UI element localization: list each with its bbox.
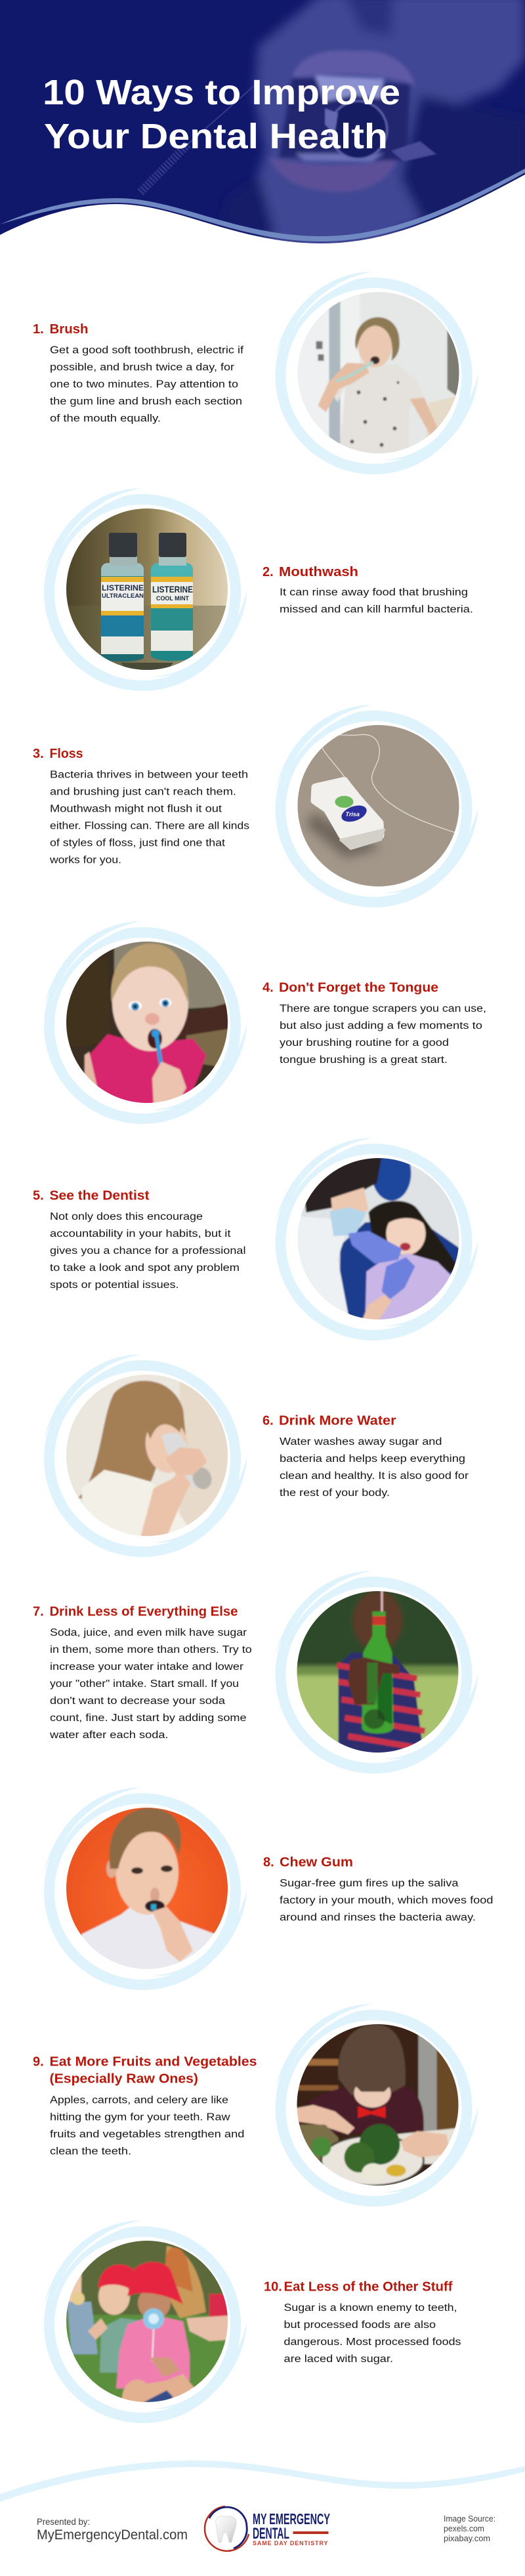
tip 6: water xyxy=(44,1354,469,1557)
presented by: MyEmergencyDental.com xyxy=(37,2527,188,2543)
body 5 xyxy=(50,1211,245,1291)
body 6: bacteria and helps keep everything xyxy=(280,1453,465,1465)
photo 3: floss box: Trisa xyxy=(345,811,360,818)
body 7: count, fine. Just start by adding some xyxy=(50,1713,247,1724)
heading 2: 2. xyxy=(262,565,274,579)
heading 9: 9. xyxy=(33,2055,44,2069)
body 7 xyxy=(49,1627,252,1741)
heading 7: Drink Less of Everything Else xyxy=(50,1605,238,1619)
wave: white page edge xyxy=(0,175,525,262)
body 3 xyxy=(49,769,249,866)
heading 10: Eat Less of the Other Stuff xyxy=(284,2280,453,2295)
dental instrument handle xyxy=(140,85,255,192)
body 9: clean the teeth. xyxy=(50,2146,131,2157)
heading 1: 1. xyxy=(33,322,44,337)
body 6: clean and healthy. It is also good for xyxy=(280,1470,469,1482)
body 1: the gum line and brush each section xyxy=(50,396,242,407)
photo 7: child holding green bottle xyxy=(276,1571,478,1774)
body 5: spots or potential issues. xyxy=(50,1279,178,1291)
body 6 xyxy=(280,1436,469,1499)
body 7: don't want to decrease your soda xyxy=(50,1695,225,1707)
logo wordmark: SAME DAY DENTISTRY xyxy=(253,2540,328,2546)
body 10 xyxy=(284,2302,461,2365)
heading 9 xyxy=(33,2055,257,2087)
body 5: gives you a chance for a professional xyxy=(50,1245,245,1257)
tip 10: less other stuff xyxy=(44,2220,461,2423)
body 6: Water washes away sugar and xyxy=(280,1436,442,1447)
photo 1: boy brushing teeth xyxy=(276,272,478,474)
heading 3: 3. xyxy=(33,747,44,761)
tip 1: brush xyxy=(33,272,478,474)
body 7: water after each soda. xyxy=(49,1730,169,1741)
photo 5: dentist examining girl xyxy=(276,1138,478,1340)
heading 6: 6. xyxy=(262,1413,274,1428)
body 5: accountability in your habits, but it xyxy=(50,1228,231,1239)
logo: My Emergency Dental xyxy=(205,2506,330,2551)
body 3: Mouthwash might not flush it out xyxy=(50,803,222,815)
body 3: either. Flossing can. There are all kinds xyxy=(50,820,249,832)
body 10: but processed foods are also xyxy=(284,2319,436,2331)
title xyxy=(43,73,400,156)
body 2: It can rinse away food that brushing xyxy=(280,587,468,598)
photo 8: boy chewing gum on orange xyxy=(44,1787,247,1990)
body 8: around and rinses the bacteria away. xyxy=(280,1912,476,1923)
body 5: Not only does this encourage xyxy=(50,1211,203,1222)
image source xyxy=(444,2514,495,2543)
presented by xyxy=(37,2517,188,2543)
heading 6: Drink More Water xyxy=(279,1413,396,1428)
tip 8: gum xyxy=(44,1787,494,1990)
heading 2: Mouthwash xyxy=(279,565,358,579)
body 9: fruits and vegetables strengthen and xyxy=(50,2129,244,2140)
body 7: increase your water intake and lower xyxy=(50,1661,243,1672)
photo 9: girl with broccoli xyxy=(276,2004,478,2207)
photo: open mouth with dental mirror xyxy=(140,0,525,249)
heading 7: 7. xyxy=(33,1605,44,1619)
body 2: missed and can kill harmful bacteria. xyxy=(280,604,473,615)
tip 2: mouthwash xyxy=(44,488,473,691)
logo wordmark: DENTAL xyxy=(253,2525,289,2543)
body 9 xyxy=(50,2094,244,2157)
body 5: to take a look and spot any problem xyxy=(50,1262,240,1274)
heading 10: 10. xyxy=(264,2280,282,2295)
heading 5: 5. xyxy=(33,1189,44,1203)
logo wordmark xyxy=(253,2510,330,2546)
heading 4: 4. xyxy=(262,980,274,995)
tip 5: dentist xyxy=(33,1138,478,1340)
body 8: factory in your mouth, which moves food xyxy=(280,1895,494,1906)
body 9: Apples, carrots, and celery are like xyxy=(50,2094,228,2106)
tip 7: drink less xyxy=(33,1571,478,1774)
body 4: your brushing routine for a good xyxy=(280,1037,449,1049)
left bottle xyxy=(101,533,144,658)
body 4: tongue brushing is a great start. xyxy=(280,1054,448,1066)
right bottle: LISTERINE xyxy=(152,584,193,594)
body 1: of the mouth equally. xyxy=(50,413,161,424)
photo 4: baby with toothbrush xyxy=(44,921,247,1124)
heading 9: Eat More Fruits and Vegetables xyxy=(50,2055,257,2069)
photo 6: girl drinking water xyxy=(44,1354,247,1557)
right bottle xyxy=(151,533,193,658)
body 4: There are tongue scrapers you can use, xyxy=(280,1003,486,1014)
heading 8: Chew Gum xyxy=(280,1856,353,1870)
logo wordmark: MY EMERGENCY xyxy=(253,2510,330,2527)
heading 1: Brush xyxy=(50,322,88,337)
left bottle: ULTRACLEAN xyxy=(102,592,144,599)
right bottle: COOL MINT xyxy=(156,595,189,602)
left bottle: LISTERINE xyxy=(102,583,144,592)
logo ring xyxy=(205,2506,249,2551)
body 10: Sugar is a known enemy to teeth, xyxy=(284,2302,457,2314)
heading 3: Floss xyxy=(50,747,83,761)
body 1: one to two minutes. Pay attention to xyxy=(50,379,238,390)
heading 8: 8. xyxy=(263,1856,274,1870)
body 3: of styles of floss, just find one that xyxy=(50,837,226,849)
heading 1 xyxy=(33,322,88,337)
body 10: are laced with sugar. xyxy=(284,2354,393,2365)
image source: pixabay.com xyxy=(444,2534,490,2543)
header banner with dental photo xyxy=(0,0,525,262)
body 2 xyxy=(280,587,473,615)
body 3: Bacteria thrives in between your teeth xyxy=(50,769,248,781)
heading 3 xyxy=(33,747,83,761)
body 10: dangerous. Most processed foods xyxy=(284,2337,461,2348)
dental mirror xyxy=(325,101,436,161)
body 7: your "other" intake. Start small. If you xyxy=(50,1678,239,1690)
body 7: in them, some more than others. Try to xyxy=(50,1644,252,1655)
body 1 xyxy=(50,345,244,424)
body 7: Soda, juice, and even milk have sugar xyxy=(50,1627,247,1638)
tip 4: tongue xyxy=(44,921,486,1124)
body 3: works for you. xyxy=(49,854,121,866)
heading 5: See the Dentist xyxy=(50,1189,150,1203)
photo 2: mouthwash bottles xyxy=(44,488,247,691)
body 8 xyxy=(280,1878,494,1923)
body 8: Sugar-free gum fires up the saliva xyxy=(280,1878,459,1889)
icon: tooth xyxy=(216,2516,236,2543)
photo 10: children with lollipops xyxy=(44,2220,247,2423)
body 1: possible, and brush twice a day, for xyxy=(50,362,234,373)
heading 4: Don't Forget the Tongue xyxy=(279,980,438,995)
image source: Image Source: xyxy=(444,2514,495,2524)
photo 3: floss box xyxy=(276,705,478,907)
tip 9: fruits and vegetables xyxy=(33,2004,478,2207)
body 1: Get a good soft toothbrush, electric if xyxy=(50,345,244,356)
tip 3: floss xyxy=(33,705,478,907)
footer wave xyxy=(0,2461,525,2502)
body 4: but also just adding a few moments to xyxy=(280,1020,482,1031)
title: 10 Ways to Improve xyxy=(43,73,400,112)
body 3: and brushing just can't reach them. xyxy=(50,786,236,798)
presented by: Presented by: xyxy=(37,2517,90,2527)
wave band xyxy=(0,169,525,241)
body 4 xyxy=(280,1003,486,1066)
heading 9: (Especially Raw Ones) xyxy=(50,2072,198,2087)
body 9: hitting the gym for your teeth. Raw xyxy=(50,2111,230,2123)
image source: pexels.com xyxy=(444,2524,484,2533)
body 6: the rest of your body. xyxy=(280,1487,390,1499)
title: Your Dental Health xyxy=(44,117,388,156)
